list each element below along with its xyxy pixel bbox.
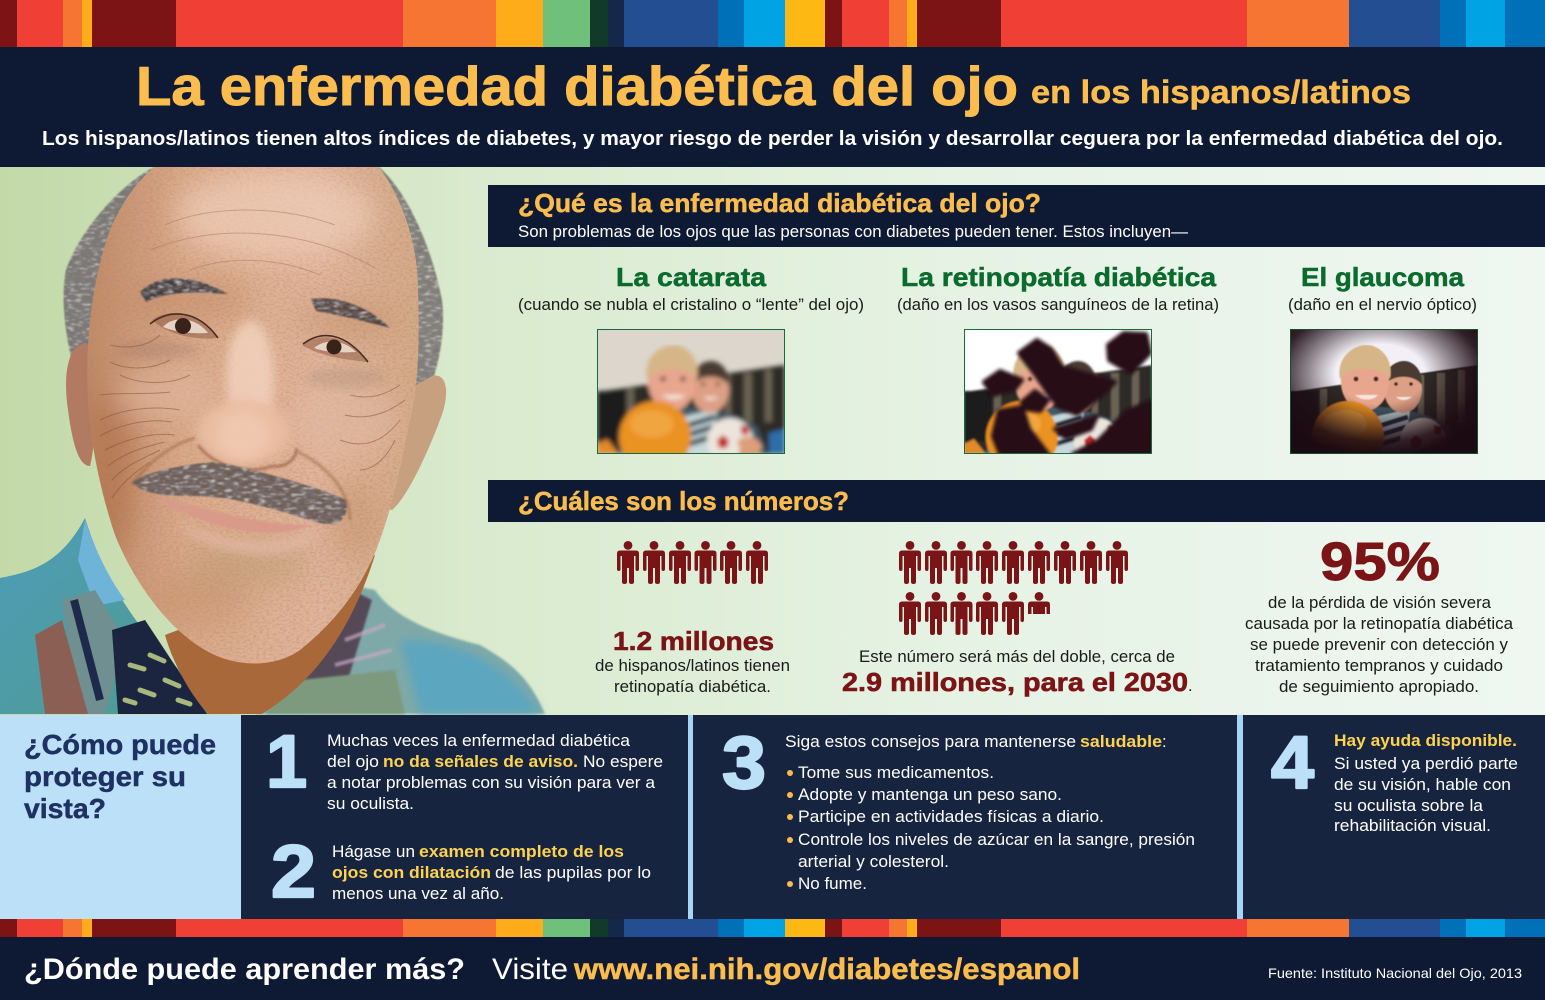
- panel: step 4 help available: su oculista sobre la: [1334, 797, 1484, 815]
- source note: Fuente: Instituto Nacional del Ojo, 2013: [1268, 965, 1522, 981]
- panel: step 3 health tips: [688, 715, 1237, 919]
- bullet list: [787, 764, 1195, 893]
- column: cataract: (cuando se nubla el cristalino o “lente” del ojo): [518, 296, 864, 314]
- colour strip: bottom: [0, 919, 1545, 937]
- stat: 95 percent: de la pérdida de visión severa: [1268, 594, 1492, 612]
- column: retinopathy: [898, 266, 1218, 454]
- photo: smiling older man: [0, 167, 545, 714]
- left eyebrow: [140, 278, 228, 302]
- stat: 1.2 million: retinopatía diabética.: [614, 678, 771, 696]
- bullet list: Controle los niveles de azúcar en la sangre, presión: [798, 831, 1195, 849]
- column: glaucoma: (daño en el nervio óptico): [1288, 296, 1477, 314]
- column: cataract: La catarata: [616, 262, 767, 292]
- stat: 95 percent: causada por la retinopatía diabética: [1245, 615, 1514, 633]
- section header bar: ¿Cuáles son los números?: [518, 486, 849, 516]
- panel: step 3 health tips: Siga estos consejos para mantenerse: [785, 733, 1076, 751]
- mouth: [155, 497, 310, 533]
- right eyebrow: [311, 298, 390, 328]
- photo: glaucoma view: [1290, 329, 1478, 454]
- shirt left: [0, 518, 210, 714]
- footer: [0, 937, 1545, 1000]
- panel: how to protect your vision: ¿Cómo puede: [24, 729, 216, 760]
- section header bar: [488, 480, 1545, 522]
- step 2: examen completo de los: [419, 843, 624, 861]
- stat: 95 percent: se puede prevenir con detección y: [1250, 636, 1509, 654]
- column: retinopathy: La retinopatía diabética: [901, 262, 1217, 292]
- step 1: del ojo: [327, 753, 379, 771]
- section header bar: [488, 185, 1545, 247]
- pictogram: fourteen and a half people: [899, 541, 1128, 635]
- title banner: [42, 55, 1503, 150]
- panel: how to protect your vision: [0, 715, 241, 919]
- smile lines: [132, 438, 350, 520]
- panel: step 4 help available: [1237, 715, 1545, 919]
- stat: 95 percent: de seguimiento apropiado.: [1279, 678, 1479, 696]
- face: [87, 167, 419, 664]
- stat: 2.9 million: .: [1188, 677, 1193, 695]
- left eye: [150, 313, 218, 338]
- stat: 1.2 million: de hispanos/latinos tienen: [595, 657, 790, 675]
- column: cataract: [519, 268, 863, 454]
- step 2: ojos con dilatación: [332, 864, 491, 882]
- panel: step 3 health tips: 3: [722, 721, 766, 804]
- panel: step 4 help available: de su visión, hable con: [1334, 776, 1511, 794]
- photo: cataract view: [597, 329, 785, 454]
- right ear: [386, 376, 446, 510]
- bullet list: Adopte y mantenga un peso sano.: [798, 786, 1062, 804]
- main title: La enfermedad diabética del ojo: [136, 55, 1018, 117]
- column: retinopathy: (daño en los vasos sanguíneos de la retina): [897, 296, 1219, 314]
- face shading: [84, 170, 400, 630]
- bullet list: Participe en actividades físicas a diario.: [798, 808, 1104, 826]
- panel: step 3 health tips: saludable: [1080, 733, 1162, 751]
- panel: steps 1 and 2: [241, 715, 688, 919]
- step 1: 1: [266, 720, 307, 803]
- title suffix: en los hispanos/latinos: [1031, 74, 1411, 110]
- stat: 1.2 million: [595, 541, 790, 696]
- pictogram: six people: [617, 541, 768, 584]
- step 1: no da señales de aviso.: [383, 753, 578, 771]
- panel: step 3 health tips: :: [1162, 733, 1167, 751]
- section header bar: Son problemas de los ojos que las personas con diabetes pueden tener. Estos incluyen—: [518, 223, 1189, 241]
- stat: 2.9 million: [842, 541, 1193, 697]
- panel: step 4 help available: rehabilitación visual.: [1334, 817, 1491, 835]
- nose: [197, 400, 289, 464]
- neck: [165, 555, 375, 714]
- stat: 2.9 million: 2.9 millones, para el 2030: [842, 667, 1188, 697]
- section header bar: ¿Qué es la enfermedad diabética del ojo?: [518, 188, 1041, 218]
- left ear: [66, 344, 95, 466]
- cheek wrinkles: [100, 335, 405, 498]
- shirt collar: [112, 620, 207, 714]
- panel: step 4 help available: Si usted ya perdió parte: [1334, 755, 1518, 773]
- stat: 2.9 million: Este número será más del doble, cerca de: [859, 648, 1175, 666]
- step 2: Hágase un: [332, 843, 415, 861]
- content background: [0, 167, 1545, 715]
- step 1: a notar problemas con su visión para ver a: [327, 774, 656, 792]
- forehead wrinkles: [150, 210, 375, 275]
- stat: 95 percent: 95%: [1320, 532, 1440, 592]
- mustache: [132, 462, 347, 524]
- step 1: Muchas veces la enfermedad diabética: [327, 732, 631, 750]
- panel: how to protect your vision: vista?: [24, 793, 106, 824]
- bullet list: Tome sus medicamentos.: [798, 764, 994, 782]
- section: what is diabetic eye disease: [488, 185, 1545, 473]
- bullet list: arterial y colesterol.: [798, 853, 949, 871]
- subtitle: Los hispanos/latinos tienen altos índices de diabetes, y mayor riesgo de perder la visión y desarrollar ceguera por la enfermedad diabética del ojo.: [42, 127, 1503, 150]
- shirt right: [255, 585, 545, 714]
- panel: step 4 help available: Hay ayuda disponible.: [1334, 732, 1517, 750]
- step 2: de las pupilas por lo: [495, 864, 651, 882]
- step 1: su oculista.: [327, 795, 414, 813]
- panel: step 4 help available: 4: [1271, 721, 1314, 804]
- bullet list: No fume.: [798, 875, 867, 893]
- stat: 95 percent: [1245, 532, 1514, 696]
- column: glaucoma: [1289, 266, 1478, 454]
- column: glaucoma: El glaucoma: [1301, 262, 1465, 292]
- right eye: [302, 336, 368, 362]
- step 1: No espere: [583, 753, 663, 771]
- stat: 95 percent: tratamiento tempranos y cuidado: [1255, 657, 1503, 675]
- stat: 1.2 million: 1.2 millones: [613, 626, 774, 656]
- step 2: [271, 830, 651, 913]
- step 2: 2: [271, 830, 316, 913]
- photo: retinopathy view: [964, 329, 1152, 454]
- colour strip: top: [0, 0, 1545, 47]
- step 1: [266, 720, 663, 813]
- footer question: ¿Dónde puede aprender más?: [24, 953, 465, 986]
- footer url: www.nei.nih.gov/diabetes/espanol: [573, 953, 1080, 986]
- section: the numbers: [488, 480, 1545, 697]
- panel: how to protect your vision: proteger su: [24, 761, 186, 792]
- step 2: menos una vez al año.: [332, 885, 504, 903]
- footer visit label: Visite: [492, 953, 568, 986]
- hair: [62, 167, 154, 357]
